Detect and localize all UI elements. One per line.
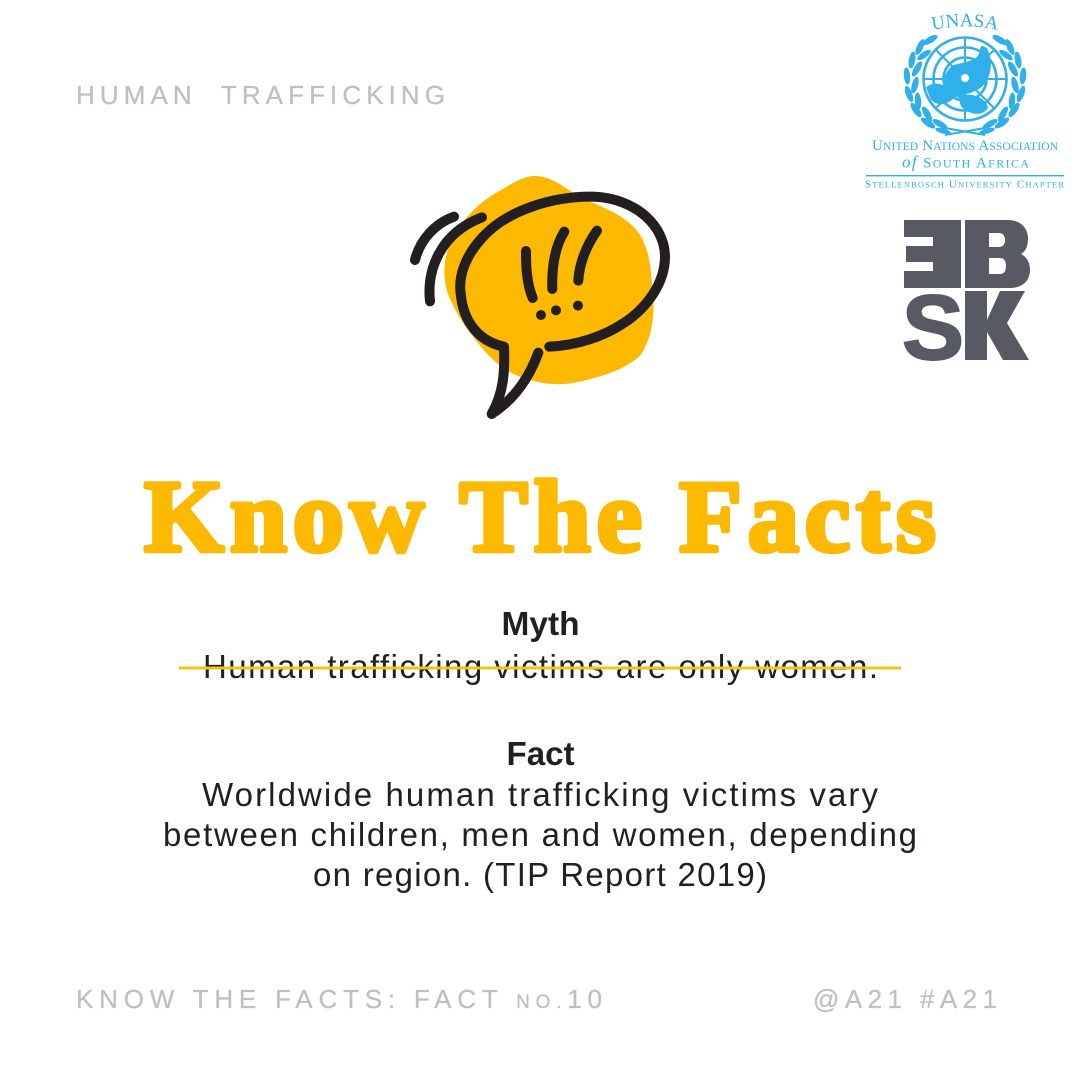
footer: fact number: KNOW THE FACTS: FACT NO.10 — [76, 984, 602, 1014]
fact heading: Fact — [506, 735, 575, 772]
letter S: S — [902, 277, 964, 379]
myth statement: Human trafficking victims are only women. — [203, 648, 878, 685]
dots — [536, 301, 583, 320]
UNASA wordmark — [928, 26, 1002, 31]
icon: speech bubble with exclamation marks — [415, 176, 665, 414]
heading: human trafficking: HUMAN TRAFFICKING — [76, 80, 445, 110]
laurel wreath — [903, 33, 1027, 136]
footer: handle: @A21 #A21 — [813, 984, 997, 1014]
strikethrough line — [179, 666, 901, 670]
fact text: between children, men and women, depending — [163, 816, 917, 853]
fact text: Worldwide human trafficking victims vary — [202, 776, 878, 813]
logo: EBSK — [902, 220, 1030, 379]
mirrored E — [904, 220, 961, 288]
fact text: on region. (TIP Report 2019) — [313, 856, 767, 893]
bubble outline — [460, 197, 665, 414]
fact text — [163, 776, 917, 893]
UN emblem — [903, 33, 1027, 136]
continents — [926, 46, 991, 114]
myth heading: Myth — [502, 605, 580, 642]
logo: UNASA: UNASA — [930, 14, 998, 30]
yellow blob — [444, 176, 654, 384]
title: Know The Facts — [144, 460, 936, 574]
UNASA full name: UNITED NATIONS ASSOCIATION — [872, 138, 1059, 154]
letter B — [965, 220, 1030, 288]
letter K — [965, 291, 1029, 360]
motion lines — [415, 217, 454, 260]
exclamation strokes — [526, 251, 533, 298]
of South Africa: of SOUTH AFRICA — [902, 152, 1029, 172]
logo: UNASA — [865, 14, 1064, 190]
chapter name: STELLENBOSCH UNIVERSITY CHAPTER — [865, 178, 1064, 190]
